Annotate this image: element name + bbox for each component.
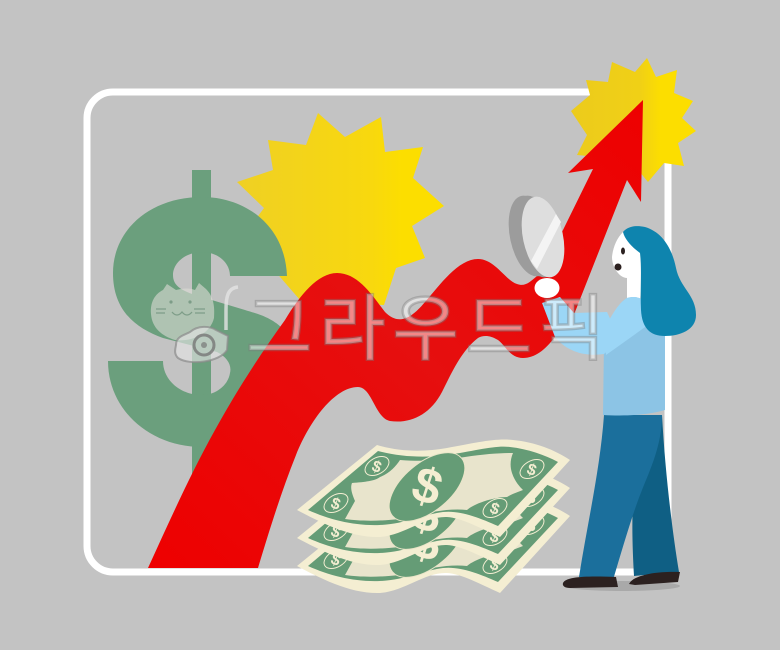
trouser back leg	[632, 415, 679, 576]
large yellow burst	[237, 113, 444, 305]
floor shadow	[564, 581, 680, 591]
watermark logo: cat and camera	[151, 283, 238, 362]
middle bill	[297, 468, 570, 565]
top bill	[297, 440, 570, 537]
watermark text: 그라우드픽	[246, 290, 612, 370]
magnifier lens	[515, 193, 571, 281]
white chart frame	[87, 92, 668, 572]
hand	[534, 278, 560, 298]
large dollar sign	[108, 170, 300, 480]
lens highlight	[531, 214, 561, 269]
arm	[542, 297, 620, 355]
magnifier rim	[502, 192, 566, 281]
sweater	[603, 297, 665, 415]
shoes	[563, 577, 618, 588]
money stack	[297, 440, 570, 593]
hair	[623, 226, 696, 336]
red rising arrow	[148, 100, 643, 568]
woman figure	[502, 192, 696, 591]
trouser front leg	[579, 415, 662, 580]
neck and face	[612, 232, 645, 300]
small yellow burst	[571, 58, 696, 182]
bottom bill	[297, 496, 570, 593]
